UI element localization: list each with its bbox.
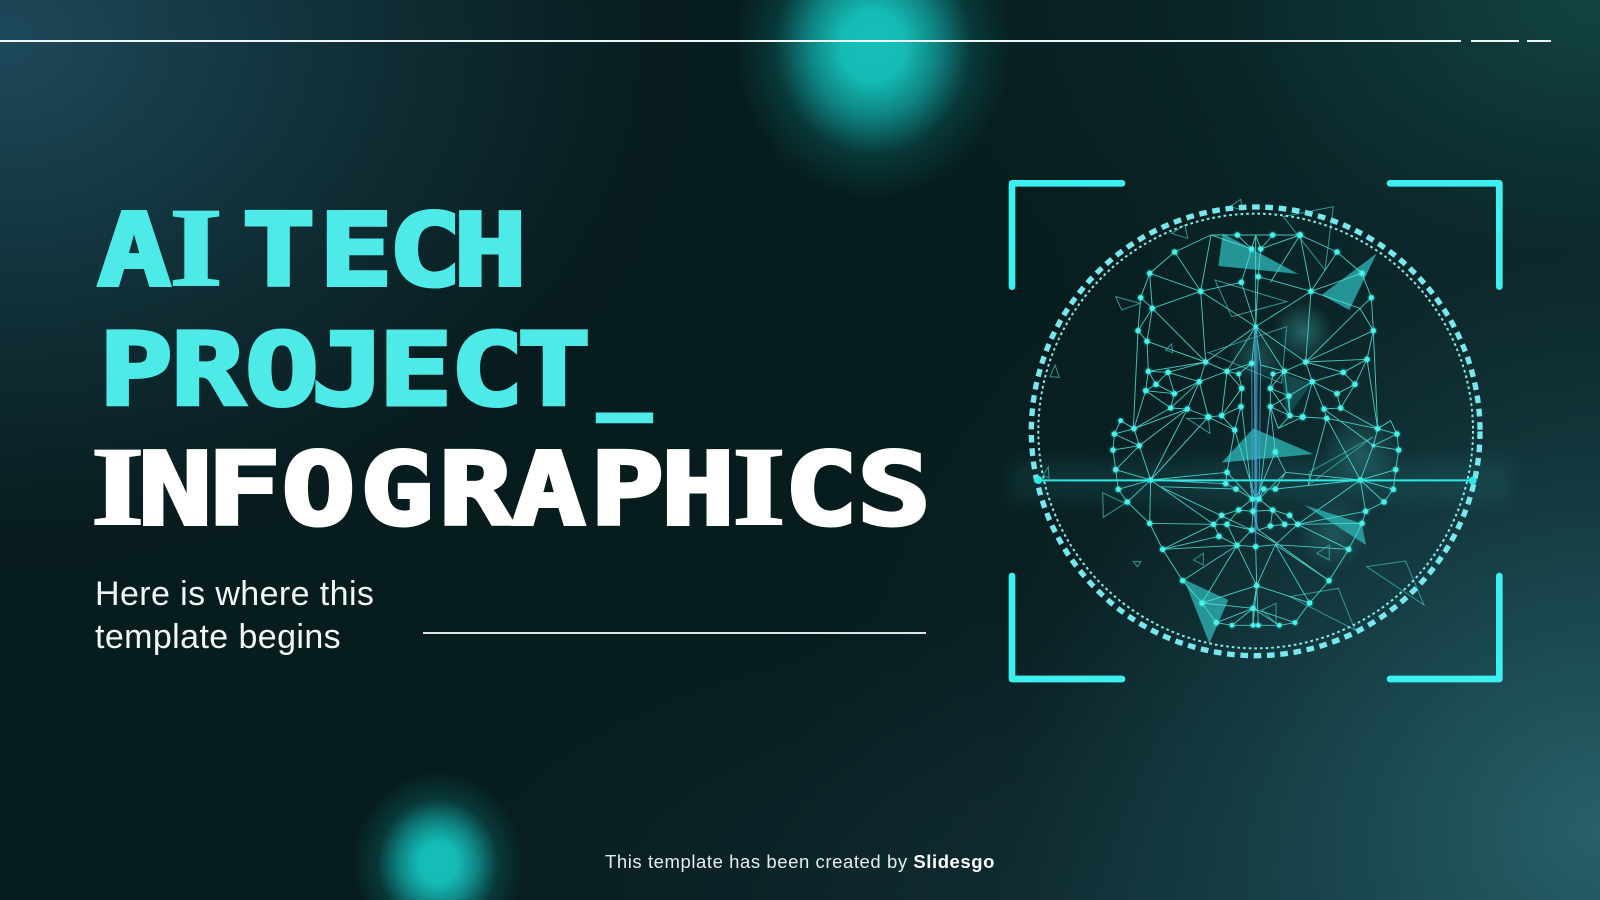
subtitle: Here is where this [95,575,374,613]
face scan illustration [1008,180,1506,682]
top rule with dashes [0,40,1551,42]
mesh nodes [1110,232,1401,628]
glow orb: bottom [352,772,524,900]
footer credit: This template has been created by Slidesgo [605,851,995,872]
corner brackets [1012,183,1499,679]
title line: AI TECH: TECH [242,193,527,309]
inner dotted ring [1038,214,1473,648]
subtitle rule [423,632,926,634]
outer dashed ring [1031,207,1480,656]
subtitle [95,575,374,656]
filled triangles [1184,233,1377,643]
title underscore: _ [596,306,653,423]
subtitle: template begins [95,618,341,656]
title line: INFOGRAPHICS: CS [784,432,931,548]
outline triangles [1043,199,1424,630]
scan band glow [1010,460,1510,502]
title line: PROJECT: PROJECT [99,312,591,429]
title line: AI TECH: I [169,186,223,310]
face mesh lines [1113,235,1399,625]
title line: INFOGRAPHICS: NFOGRAPH [138,432,735,548]
title line: AI TECH: A [97,193,171,309]
title [91,186,931,549]
title line: INFOGRAPHICS: I [91,425,144,549]
title line: INFOGRAPHICS: I [732,425,786,549]
glow orb: top [733,0,1013,205]
glow spots [1227,302,1400,570]
scan line [1034,476,1477,485]
central vertical bundle [1252,327,1261,547]
